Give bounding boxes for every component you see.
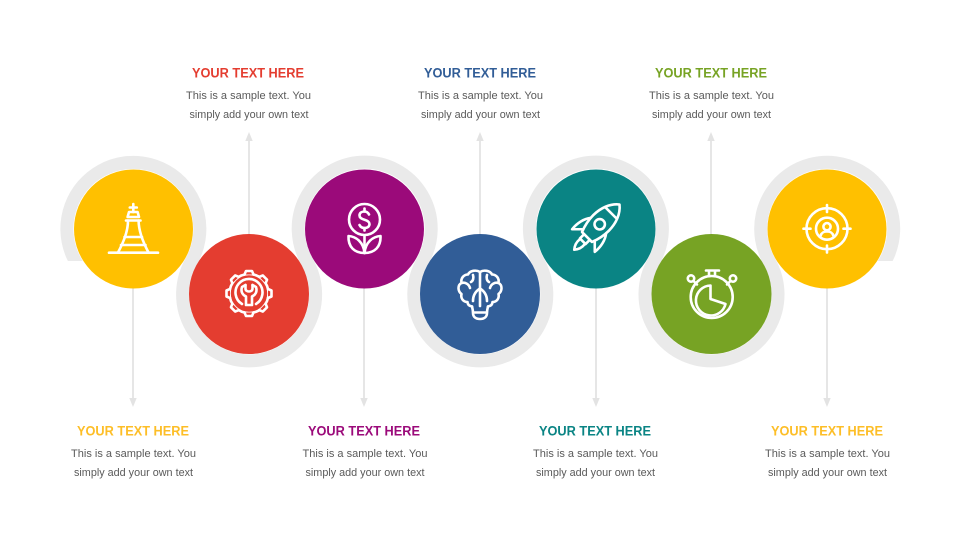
arrow: down from step 5 (592, 285, 600, 407)
heading: step 5: YOUR TEXT HERE (539, 424, 651, 438)
circle: amber (768, 170, 886, 288)
heading: step 2: YOUR TEXT HERE (192, 66, 304, 80)
text block: step 2: simply add your own text (190, 109, 308, 121)
icon: target person (804, 205, 850, 252)
icon: stopwatch (688, 270, 736, 318)
step 2: settings (186, 66, 311, 354)
icon: gear with wrench (226, 271, 272, 316)
text block: step 1: This is a sample text. You (71, 448, 196, 460)
heading: step 4: YOUR TEXT HERE (424, 66, 536, 80)
arrow: down from step 3 (360, 285, 368, 407)
text block: step 5: This is a sample text. You (533, 448, 658, 460)
text block: step 3 (302, 448, 428, 479)
step 6: time (649, 66, 774, 354)
circle: green (652, 234, 772, 354)
text block: step 6: simply add your own text (652, 109, 771, 121)
text block: step 6 (649, 90, 774, 121)
text block: step 4: This is a sample text. You (418, 90, 543, 102)
icon: rocket (563, 193, 631, 261)
arrow: down from step 7 (823, 285, 831, 407)
arrow: down from step 1 (129, 285, 137, 407)
circle: purple (305, 170, 424, 288)
text block: step 7: simply add your own text (768, 467, 887, 479)
serpentine grey ring (67, 162, 894, 361)
circle: yellow (74, 170, 193, 288)
text block: step 1: simply add your own text (74, 467, 193, 479)
arrow: up from step 4 (476, 132, 484, 238)
heading: step 6: YOUR TEXT HERE (655, 66, 767, 80)
text block: step 2 (186, 90, 311, 121)
heading: step 7: YOUR TEXT HERE (771, 424, 883, 438)
circle: blue (420, 234, 540, 354)
text block: step 2: This is a sample text. You (186, 90, 311, 102)
step 3: finance (302, 170, 428, 479)
arrow: up from step 2 (245, 132, 253, 238)
icon: dollar plant (348, 204, 381, 253)
heading: step 3: YOUR TEXT HERE (308, 424, 420, 438)
step 5: launch (533, 170, 658, 479)
icon: chess king (109, 204, 158, 253)
text block: step 3: This is a sample text. You (302, 448, 428, 460)
arrow: up from step 6 (707, 132, 715, 238)
text block: step 5 (533, 448, 658, 479)
text block: step 4 (418, 90, 543, 121)
icon: brain bulb (458, 271, 502, 319)
step 1: strategy (71, 170, 196, 479)
circle: teal (536, 170, 656, 288)
text block: step 1 (71, 448, 196, 479)
text block: step 4: simply add your own text (421, 109, 540, 121)
heading: step 1: YOUR TEXT HERE (77, 424, 189, 438)
text block: step 7: This is a sample text. You (765, 448, 890, 460)
step 4: ideas (418, 66, 543, 354)
circle: red (189, 234, 309, 354)
text block: step 5: simply add your own text (536, 467, 655, 479)
text block: step 7 (765, 448, 890, 479)
text block: step 3: simply add your own text (306, 467, 424, 479)
step 7: target (765, 170, 890, 479)
text block: step 6: This is a sample text. You (649, 90, 774, 102)
